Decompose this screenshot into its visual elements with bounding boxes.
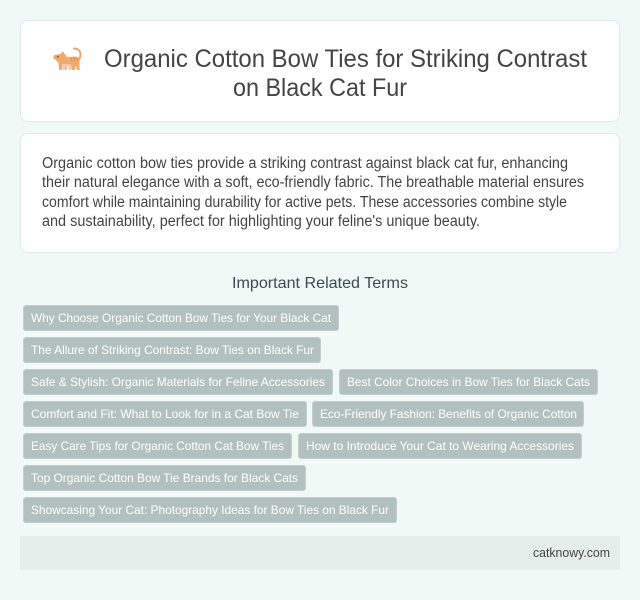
related terms tags — [24, 306, 598, 522]
description text: Organic cotton bow ties provide a striking contrast against black cat fur, enhancing — [42, 155, 568, 172]
tag — [24, 434, 292, 458]
icon: cat — [53, 48, 80, 70]
tag — [24, 498, 396, 522]
tag: Why Choose Organic Cotton Bow Ties for Your Black Cat — [31, 311, 332, 325]
tag: Top Organic Cotton Bow Tie Brands for Black Cats — [31, 471, 298, 485]
tag: Best Color Choices in Bow Ties for Black Cats — [347, 375, 590, 389]
footer — [20, 536, 620, 570]
tag — [298, 434, 582, 458]
tag: Safe & Stylish: Organic Materials for Feline Accessories — [31, 375, 325, 389]
tag — [24, 338, 320, 362]
heading: important related terms: Important Related Terms — [232, 275, 408, 292]
tag: How to Introduce Your Cat to Wearing Accessories — [306, 439, 574, 453]
panel: description — [20, 134, 620, 252]
tag: Easy Care Tips for Organic Cotton Cat Bow Ties — [31, 439, 284, 453]
title panel — [20, 20, 620, 122]
title text: Organic Cotton Bow Ties for Striking Contrast — [104, 45, 587, 73]
description text: their natural elegance with a soft, eco-friendly fabric. The breathable material ensures — [42, 174, 584, 191]
tag: Showcasing Your Cat: Photography Ideas for Bow Ties on Black Fur — [31, 503, 389, 517]
tag — [24, 402, 306, 426]
tag: Comfort and Fit: What to Look for in a Cat Bow Tie — [31, 407, 299, 421]
description text — [42, 155, 584, 230]
tag — [340, 370, 598, 394]
tag: Eco-Friendly Fashion: Benefits of Organic Cotton — [320, 407, 577, 421]
footer text: site name: catknowy.com — [533, 545, 610, 560]
tag — [24, 466, 306, 490]
description text: comfort while maintaining durability for active pets. These accessories combine style — [42, 194, 567, 211]
description text: and sustainability, perfect for highlighting your feline's unique beauty. — [42, 213, 480, 230]
tag — [24, 306, 338, 330]
title text — [104, 45, 587, 102]
tag — [312, 402, 584, 426]
tag — [24, 370, 332, 394]
title text: on Black Cat Fur — [233, 74, 407, 102]
tag: The Allure of Striking Contrast: Bow Ties on Black Fur — [31, 343, 314, 357]
